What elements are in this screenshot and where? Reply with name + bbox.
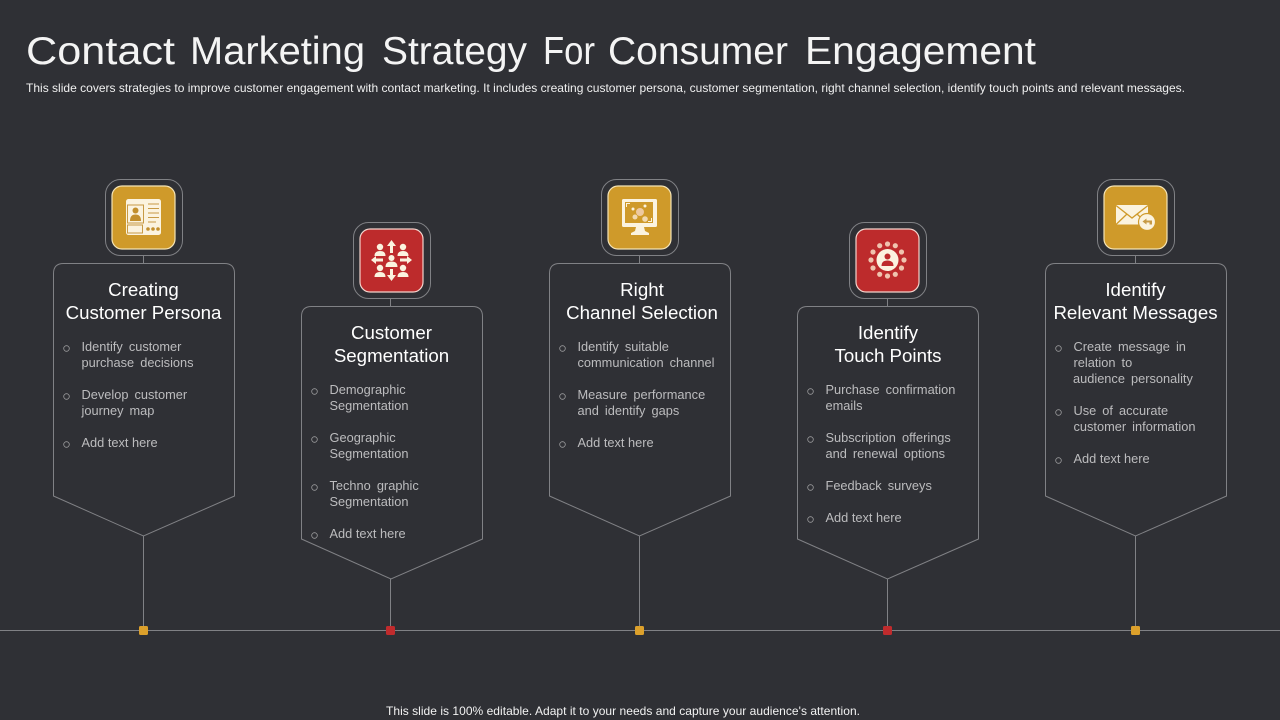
icon: monitor with channels	[602, 180, 678, 256]
bullet list: purchase decisions	[82, 355, 194, 370]
timeline marker	[139, 626, 148, 635]
bullet list	[312, 382, 419, 541]
panel: identify relevant messages	[1046, 180, 1226, 635]
subtitle: This slide covers strategies to improve customer engagement with contact marketing. It includes creating customer persona, customer segmentation, right channel selection, identify touch points and relevant messages.	[26, 81, 1185, 95]
title	[26, 30, 1036, 73]
heading: Identify	[858, 322, 919, 343]
heading: Touch Points	[834, 345, 942, 366]
title: Consumer	[608, 30, 788, 73]
icon: customer profile card	[106, 180, 182, 256]
panel: customer segmentation	[302, 222, 482, 635]
bullet list: Add text here	[330, 526, 406, 541]
title: Engagement	[805, 30, 1036, 73]
bullet list: and identify gaps	[578, 403, 679, 418]
timeline marker	[635, 626, 644, 635]
bullet list: Add text here	[82, 435, 158, 450]
bullet list: customer information	[1074, 419, 1195, 434]
bullet list: Subscription offerings	[826, 430, 951, 445]
bullet list: communication channel	[578, 355, 714, 370]
heading: Customer Persona	[66, 302, 222, 323]
timeline marker	[883, 626, 892, 635]
title: Contact	[26, 30, 175, 73]
bullet list	[560, 339, 714, 450]
bullet list	[64, 339, 194, 450]
heading: Identify	[1105, 279, 1166, 300]
bullet list: Identify customer	[82, 339, 182, 354]
bullet list: and renewal options	[826, 446, 945, 461]
footer note: This slide is 100% editable. Adapt it to your needs and capture your audience's attention.	[386, 704, 860, 718]
title: For	[543, 30, 595, 73]
heading: Segmentation	[334, 345, 449, 366]
bullet list: Add text here	[578, 435, 654, 450]
bullet list: Add text here	[1074, 451, 1150, 466]
bullet list: Feedback surveys	[826, 478, 932, 493]
heading: Channel Selection	[566, 302, 718, 323]
bullet list: Purchase confirmation	[826, 382, 955, 397]
title: Strategy	[382, 30, 527, 73]
bullet list: Demographic	[330, 382, 406, 397]
bullet list: emails	[826, 398, 862, 413]
icon: people segmentation arrows	[354, 222, 430, 298]
timeline axis	[0, 630, 1280, 632]
bullet list	[808, 382, 955, 525]
heading: Customer	[351, 322, 432, 343]
bullet list: Use of accurate	[1074, 403, 1168, 418]
bullet list: relation to	[1074, 355, 1132, 370]
heading: Right	[620, 279, 665, 300]
bullet list: audience personality	[1073, 371, 1193, 386]
icon: person with touch points	[850, 222, 926, 298]
bullet list: Segmentation	[330, 494, 408, 509]
bullet list: Techno graphic	[330, 478, 419, 493]
panel: right channel selection	[550, 180, 730, 635]
bullet list: Measure performance	[578, 387, 705, 402]
bullet list: Add text here	[826, 510, 902, 525]
bullet list: journey map	[80, 403, 154, 418]
bullet list: Segmentation	[330, 398, 408, 413]
heading: Relevant Messages	[1053, 302, 1218, 323]
bullet list: Develop customer	[82, 387, 188, 402]
panel: identify touch points	[798, 222, 978, 635]
icon: envelope with reply badge	[1098, 180, 1174, 256]
bullet list: Create message in	[1074, 339, 1186, 354]
timeline marker	[386, 626, 395, 635]
bullet list: Geographic	[330, 430, 396, 445]
heading: Creating	[108, 279, 179, 300]
timeline marker	[1131, 626, 1140, 635]
panel: creating customer persona	[54, 180, 234, 635]
bullet list	[1056, 339, 1195, 466]
bullet list: Segmentation	[330, 446, 408, 461]
bullet list: Identify suitable	[578, 339, 669, 354]
title: Marketing	[190, 30, 365, 73]
